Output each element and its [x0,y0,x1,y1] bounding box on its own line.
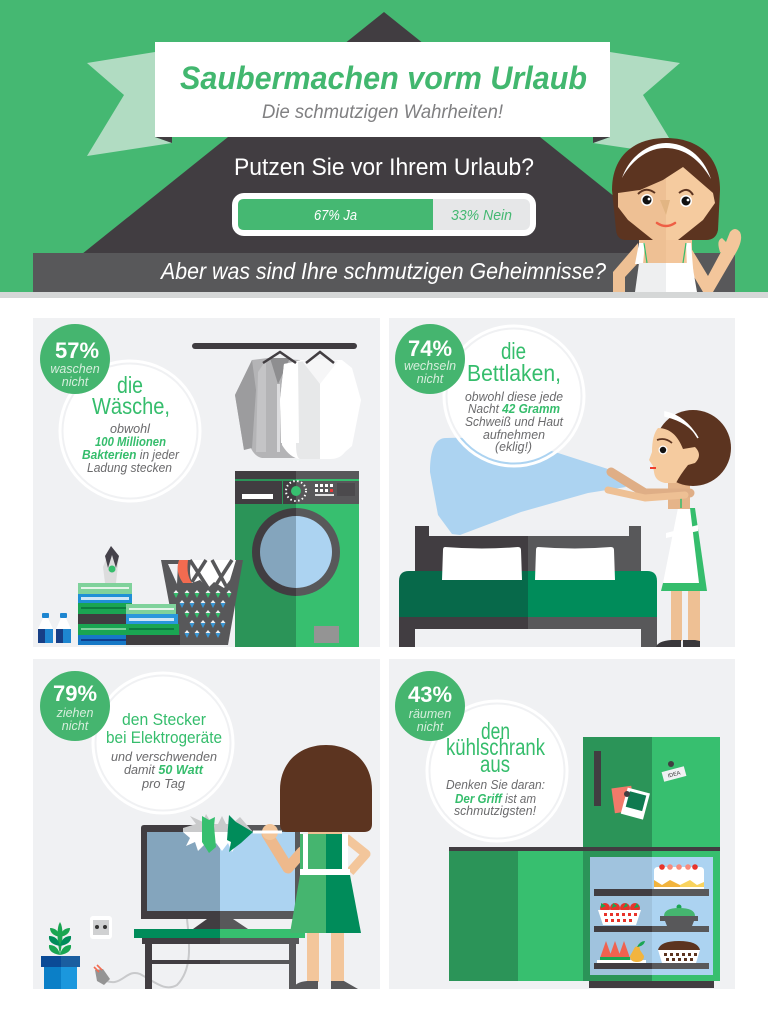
text circle: bedding: Bettlaken, [467,360,561,386]
text circle: bedding: Schweiß und Haut [465,415,564,429]
text circle: laundry: Bakterien in jeder [82,448,180,462]
clothes rail [192,343,357,349]
ribbon folds [155,137,610,143]
wall socket [90,916,112,939]
dark triangle [82,12,686,254]
bottles [38,613,71,643]
text circle: electronics: pro Tag [141,777,185,791]
fridge interior [590,857,713,975]
panel: laundry [33,318,380,647]
white shirt [280,359,361,459]
tv table [134,929,305,989]
question: Putzen Sie vor Ihrem Urlaub? [234,154,534,181]
badge: 74% [395,324,465,394]
dark strip [33,253,735,292]
badge: 74%: wechseln [404,359,456,373]
badge: 79%: nicht [62,719,89,733]
text circle: fridge: Denken Sie daran: [446,778,545,792]
badge: 43%: nicht [417,720,444,734]
ribbon left [87,52,172,156]
badge: 79%: 79% [53,681,97,706]
text circle: fridge [427,701,567,841]
text circle: electronics: damit 50 Watt [124,763,204,777]
panel: bedding [389,318,735,647]
text circle: fridge: schmutzigsten! [454,804,537,818]
poll bar [232,193,536,236]
text circle: fridge: aus [480,751,510,777]
text circle: bedding: die [501,338,526,364]
pot [660,904,698,926]
title: Saubermachen vorm Urlaub [180,60,587,96]
text circle: electronics: den Stecker [122,710,206,729]
plug [94,965,110,985]
text circle: bedding: obwohl diese jede [465,390,563,404]
cake [654,864,704,889]
note on fridge [662,761,686,782]
badge: 79%: ziehen [56,706,93,720]
text circle: fridge: kühlschrank [446,734,545,760]
badge: 74%: nicht [417,372,444,386]
badge: 43%: 43% [408,682,452,707]
text circle: fridge: den [481,718,510,744]
text circle: laundry [60,361,200,501]
woman dusting, from behind [262,745,372,989]
text circle: electronics [93,673,233,813]
washing machine [235,471,359,647]
title box [155,42,610,137]
badge: 74%: 74% [408,336,452,361]
text circle: electronics: bei Elektrogeräte [106,728,222,747]
tomato basket [598,903,641,925]
fridge upper door [583,737,720,847]
cable [102,919,189,987]
feather duster [183,814,282,853]
photos on fridge [611,786,650,820]
text circle: laundry: 100 Millionen [95,435,166,449]
header band [0,0,768,298]
text circle: fridge: Der Griff ist am [455,792,536,806]
lower cabinet [449,847,720,988]
secret question: Aber was sind Ihre schmutzigen Geheimnisse? [159,258,606,284]
badge: 43% [395,671,465,741]
poll bar: 33% Nein [451,207,512,224]
subtitle: Die schmutzigen Wahrheiten! [262,102,504,123]
text circle: laundry: Ladung stecken [87,461,172,475]
bed [399,526,657,647]
television [141,825,300,929]
text circle: laundry: Wäsche, [92,393,170,419]
ribbon right [593,52,680,156]
text circle: laundry: obwohl [110,422,151,436]
badge: 79% [40,671,110,741]
grey shirt [235,358,303,458]
panel: fridge [389,659,735,989]
text circle: bedding: aufnehmen [483,428,545,442]
text circle: bedding [444,326,584,466]
badge: 43%: räumen [409,707,451,721]
badge: 57%: 57% [55,338,99,363]
panel: electronics [33,659,380,989]
badge: 57%: nicht [62,375,89,389]
text circle: bedding: (eklig!) [495,440,532,454]
text circle: electronics: und verschwenden [111,750,217,764]
iron [103,546,119,583]
note on fridge: IDEA [667,770,682,780]
bed sheet [430,438,626,535]
text circle: bedding: Nacht 42 Gramm [468,402,560,416]
badge: 57%: waschen [50,362,100,376]
hangers [263,352,334,363]
badge: 57% [40,324,110,394]
woman shaking sheet [608,410,731,647]
woman waving [612,138,741,292]
watermelon and pear [597,941,646,963]
poll bar: 67% Ja [314,207,357,224]
chocolate basket [658,941,700,963]
text circle: laundry: die [117,372,143,398]
laundry basket [161,560,243,645]
potted plant [41,922,80,989]
towel stacks [78,583,180,645]
